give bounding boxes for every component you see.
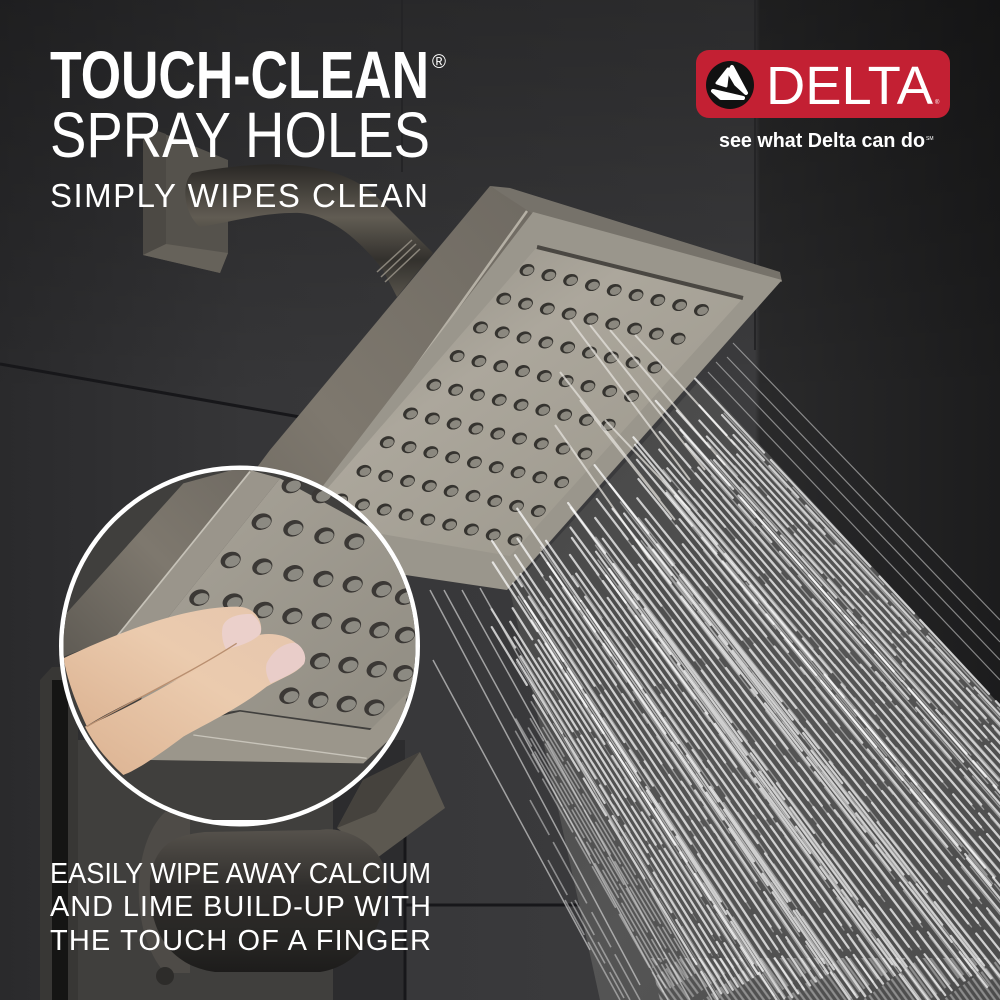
inset white ring — [59, 466, 420, 826]
lower-left short streaks — [530, 800, 640, 1000]
water spray — [430, 320, 1000, 1000]
handle barrel — [150, 829, 387, 972]
head recessed plate — [300, 247, 743, 556]
delta logo — [696, 50, 950, 152]
inset head side — [63, 463, 257, 657]
shower arm flange — [143, 130, 228, 273]
logo red badge — [696, 50, 950, 118]
head top lip — [490, 186, 782, 282]
logo tagline: see what Delta can do — [719, 130, 925, 152]
handle back flange — [139, 812, 190, 973]
inset spray holes — [187, 474, 417, 719]
subtitle: SIMPLY WIPES CLEAN — [50, 177, 428, 214]
bottom caption — [50, 858, 431, 957]
logo emblem — [706, 61, 754, 109]
sparse outer streaks right — [708, 343, 1000, 680]
handle lever — [337, 752, 445, 858]
inset lower bezel — [130, 693, 407, 763]
valve handle — [139, 752, 445, 985]
spray haze — [510, 380, 1000, 1000]
bottom edge streak band — [650, 958, 1000, 1000]
shower head — [120, 186, 782, 650]
title: touch-clean: TOUCH-CLEAN — [50, 38, 429, 113]
logo wordmark: DELTA — [766, 56, 933, 116]
bottom caption: EASILY WIPE AWAY CALCIUM — [50, 858, 431, 890]
logo registered mark: ® — [935, 99, 940, 106]
streaks over head face — [555, 320, 735, 560]
inset circle magnified view — [50, 460, 430, 826]
valve trim plate — [40, 667, 333, 1000]
spray holes — [331, 262, 711, 548]
bottom caption: AND LIME BUILD-UP WITH — [50, 891, 431, 923]
inset head bevel — [117, 470, 280, 637]
inset head plate — [133, 478, 430, 730]
sparse outer streaks left — [430, 588, 712, 1000]
head side body — [120, 186, 533, 650]
shower arm — [185, 164, 433, 297]
registered mark: ® — [432, 52, 446, 73]
upper finger — [63, 607, 261, 727]
bottom caption: THE TOUCH OF A FINGER — [50, 925, 431, 957]
handle screw — [156, 967, 174, 985]
logo service mark: SM — [926, 136, 934, 142]
lower finger — [85, 634, 305, 775]
head face — [270, 212, 782, 590]
title: spray holes: SPRAY HOLES — [50, 99, 430, 171]
water streaks secondary — [492, 413, 1000, 1000]
inset backdrop — [50, 460, 430, 820]
water streaks primary — [464, 379, 1000, 1000]
